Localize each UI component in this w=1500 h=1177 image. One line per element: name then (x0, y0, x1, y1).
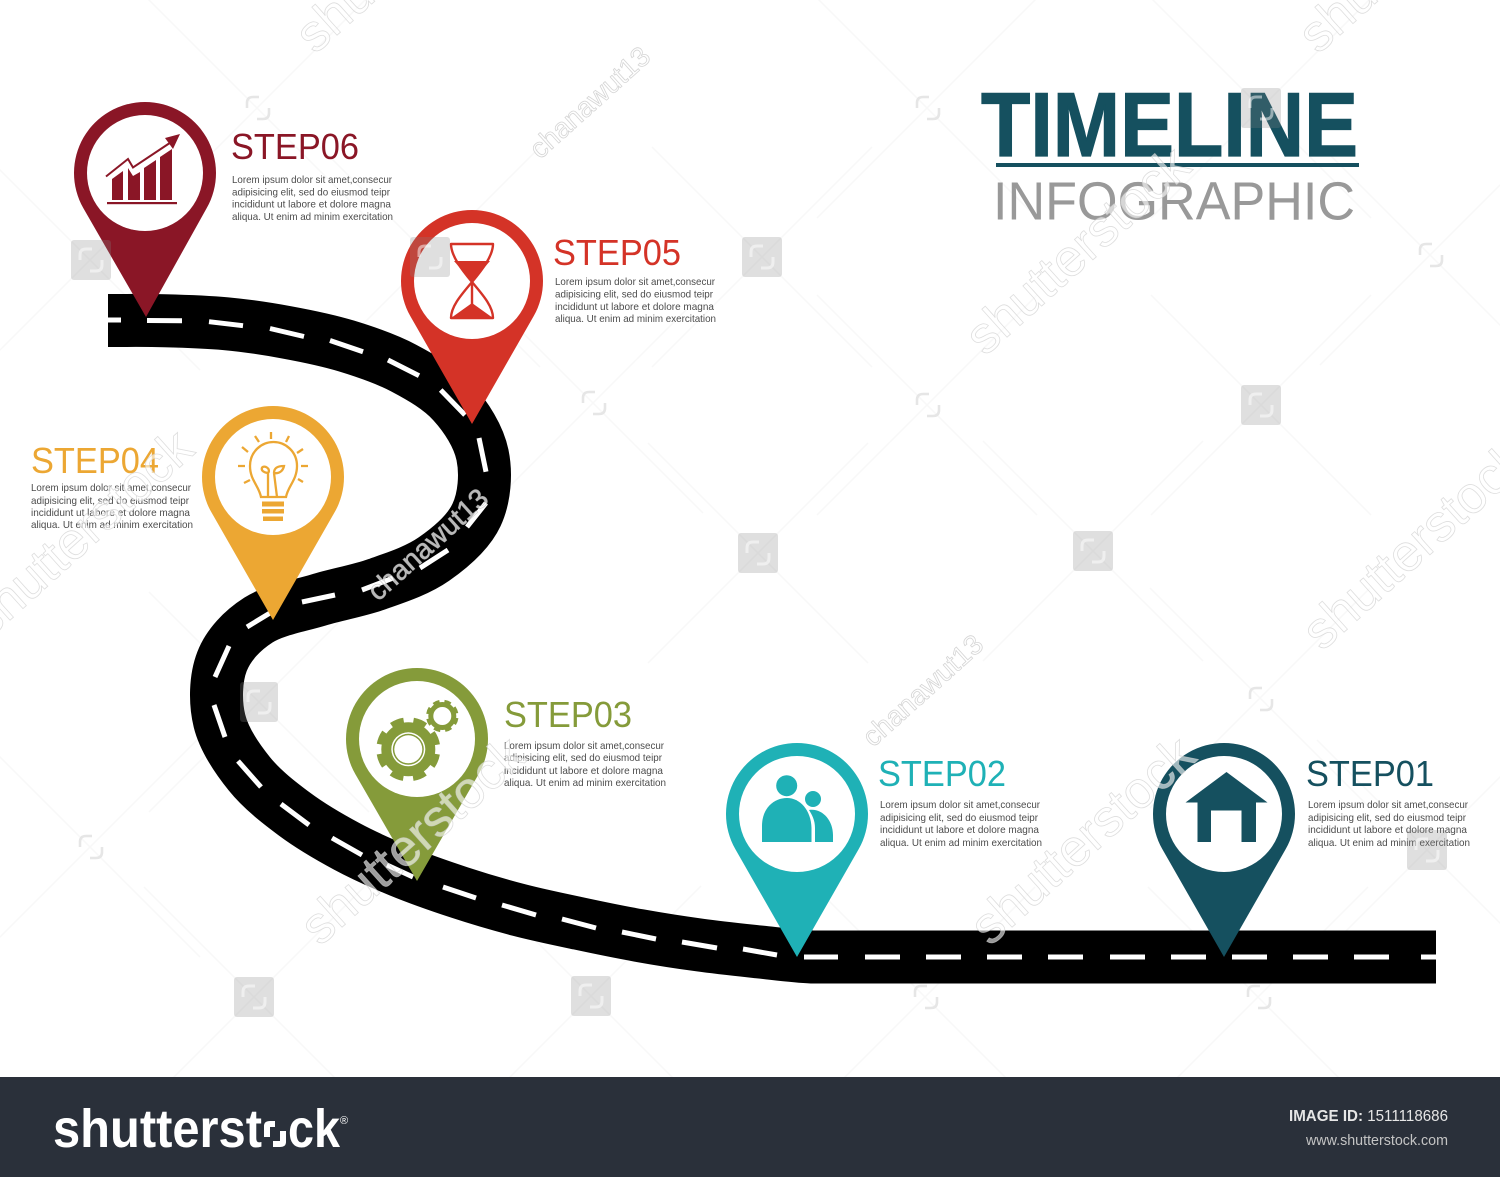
pin: step 01 (1153, 743, 1295, 957)
heading: STEP03: STEP03 (504, 694, 632, 735)
text block: step 01: aliqua. Ut enim ad minim exercitation (1308, 838, 1470, 849)
pin: step 06 (74, 102, 216, 317)
road (108, 320, 1436, 957)
watermark overlay: chanawut13 (361, 482, 494, 606)
pin: step 05 (401, 210, 543, 424)
watermark overlay: shutterstock (959, 725, 1207, 956)
title: TIMELINE: TIMELINE (981, 75, 1358, 176)
heading: STEP05: STEP05 (553, 232, 681, 273)
text block: step 02: adipisicing elit, sed do eiusmod teipr (880, 813, 1039, 824)
text block: step 05: incididunt ut labore et dolore magna (555, 302, 714, 313)
text block: step 03: incididunt ut labore et dolore magna (504, 766, 663, 777)
text block: step 04 (31, 483, 193, 531)
title underline (996, 163, 1359, 167)
icon: gears (379, 702, 457, 778)
heading: STEP01: STEP01 (1306, 753, 1434, 794)
text block: step 03: Lorem ipsum dolor sit amet,consecur (504, 741, 665, 752)
pin: step 04 (202, 406, 344, 620)
watermark overlay: chanawut13 (856, 628, 989, 752)
icon: rising bar chart (106, 134, 180, 204)
text block: step 06: adipisicing elit, sed do eiusmod teipr (232, 188, 391, 198)
text block: step 04: incididunt ut labore et dolore magna (31, 508, 190, 519)
text block: step 01: Lorem ipsum dolor sit amet,consecur (1308, 800, 1469, 811)
text block: step 06: incididunt ut labore et dolore magna (232, 200, 391, 210)
text block: step 02: Lorem ipsum dolor sit amet,consecur (880, 800, 1041, 811)
text block: step 02: incididunt ut labore et dolore magna (880, 825, 1039, 836)
text block: step 05: adipisicing elit, sed do eiusmod teipr (555, 290, 714, 300)
watermark overlay: chanawut13 (523, 40, 656, 164)
text block: step 04: aliqua. Ut enim ad minim exercitation (31, 520, 193, 531)
text block: step 01 (1308, 800, 1470, 849)
icon: light bulb (238, 432, 308, 521)
footer logo: shutterst (53, 1099, 262, 1159)
image id: IMAGE ID: 1511118686 (1289, 1108, 1448, 1125)
website: www.shutterstock.com (1305, 1132, 1448, 1149)
pin: step 02 (726, 743, 868, 957)
icon: house (1186, 772, 1268, 842)
text block: step 04: Lorem ipsum dolor sit amet,consecur (31, 483, 192, 494)
footer logo: ck (288, 1099, 341, 1159)
pin: step 03 (346, 668, 488, 881)
text block: step 06: Lorem ipsum dolor sit amet,consecur (232, 175, 393, 186)
text block: step 04: adipisicing elit, sed do eiusmod teipr (31, 496, 190, 507)
text block: step 05: Lorem ipsum dolor sit amet,consecur (555, 277, 716, 288)
text block: step 01: incididunt ut labore et dolore magna (1308, 825, 1467, 836)
watermark overlay: shutterstock (954, 135, 1202, 366)
text block: step 03 (504, 741, 666, 789)
watermark overlay: shutterstock (289, 725, 537, 956)
text block: step 03: adipisicing elit, sed do eiusmod teipr (504, 753, 663, 764)
heading: STEP04: STEP04 (31, 440, 159, 481)
text block: step 02 (880, 800, 1042, 849)
footer logo: ® (340, 1115, 348, 1127)
heading: STEP06: STEP06 (231, 126, 359, 167)
icon: hourglass (451, 244, 493, 318)
text block: step 03: aliqua. Ut enim ad minim exercitation (504, 778, 666, 789)
subtitle: INFOGRAPHIC: INFOGRAPHIC (993, 172, 1355, 232)
text block: step 01: adipisicing elit, sed do eiusmod teipr (1308, 813, 1467, 824)
footer bar (0, 1077, 1500, 1177)
text block: step 06: aliqua. Ut enim ad minim exercitation (232, 212, 393, 223)
text block: step 06 (232, 175, 393, 223)
text block: step 05 (555, 277, 716, 325)
text block: step 05: aliqua. Ut enim ad minim exercitation (555, 314, 716, 325)
icon: people (762, 775, 833, 842)
heading: STEP02: STEP02 (878, 753, 1006, 794)
text block: step 02: aliqua. Ut enim ad minim exercitation (880, 838, 1042, 849)
